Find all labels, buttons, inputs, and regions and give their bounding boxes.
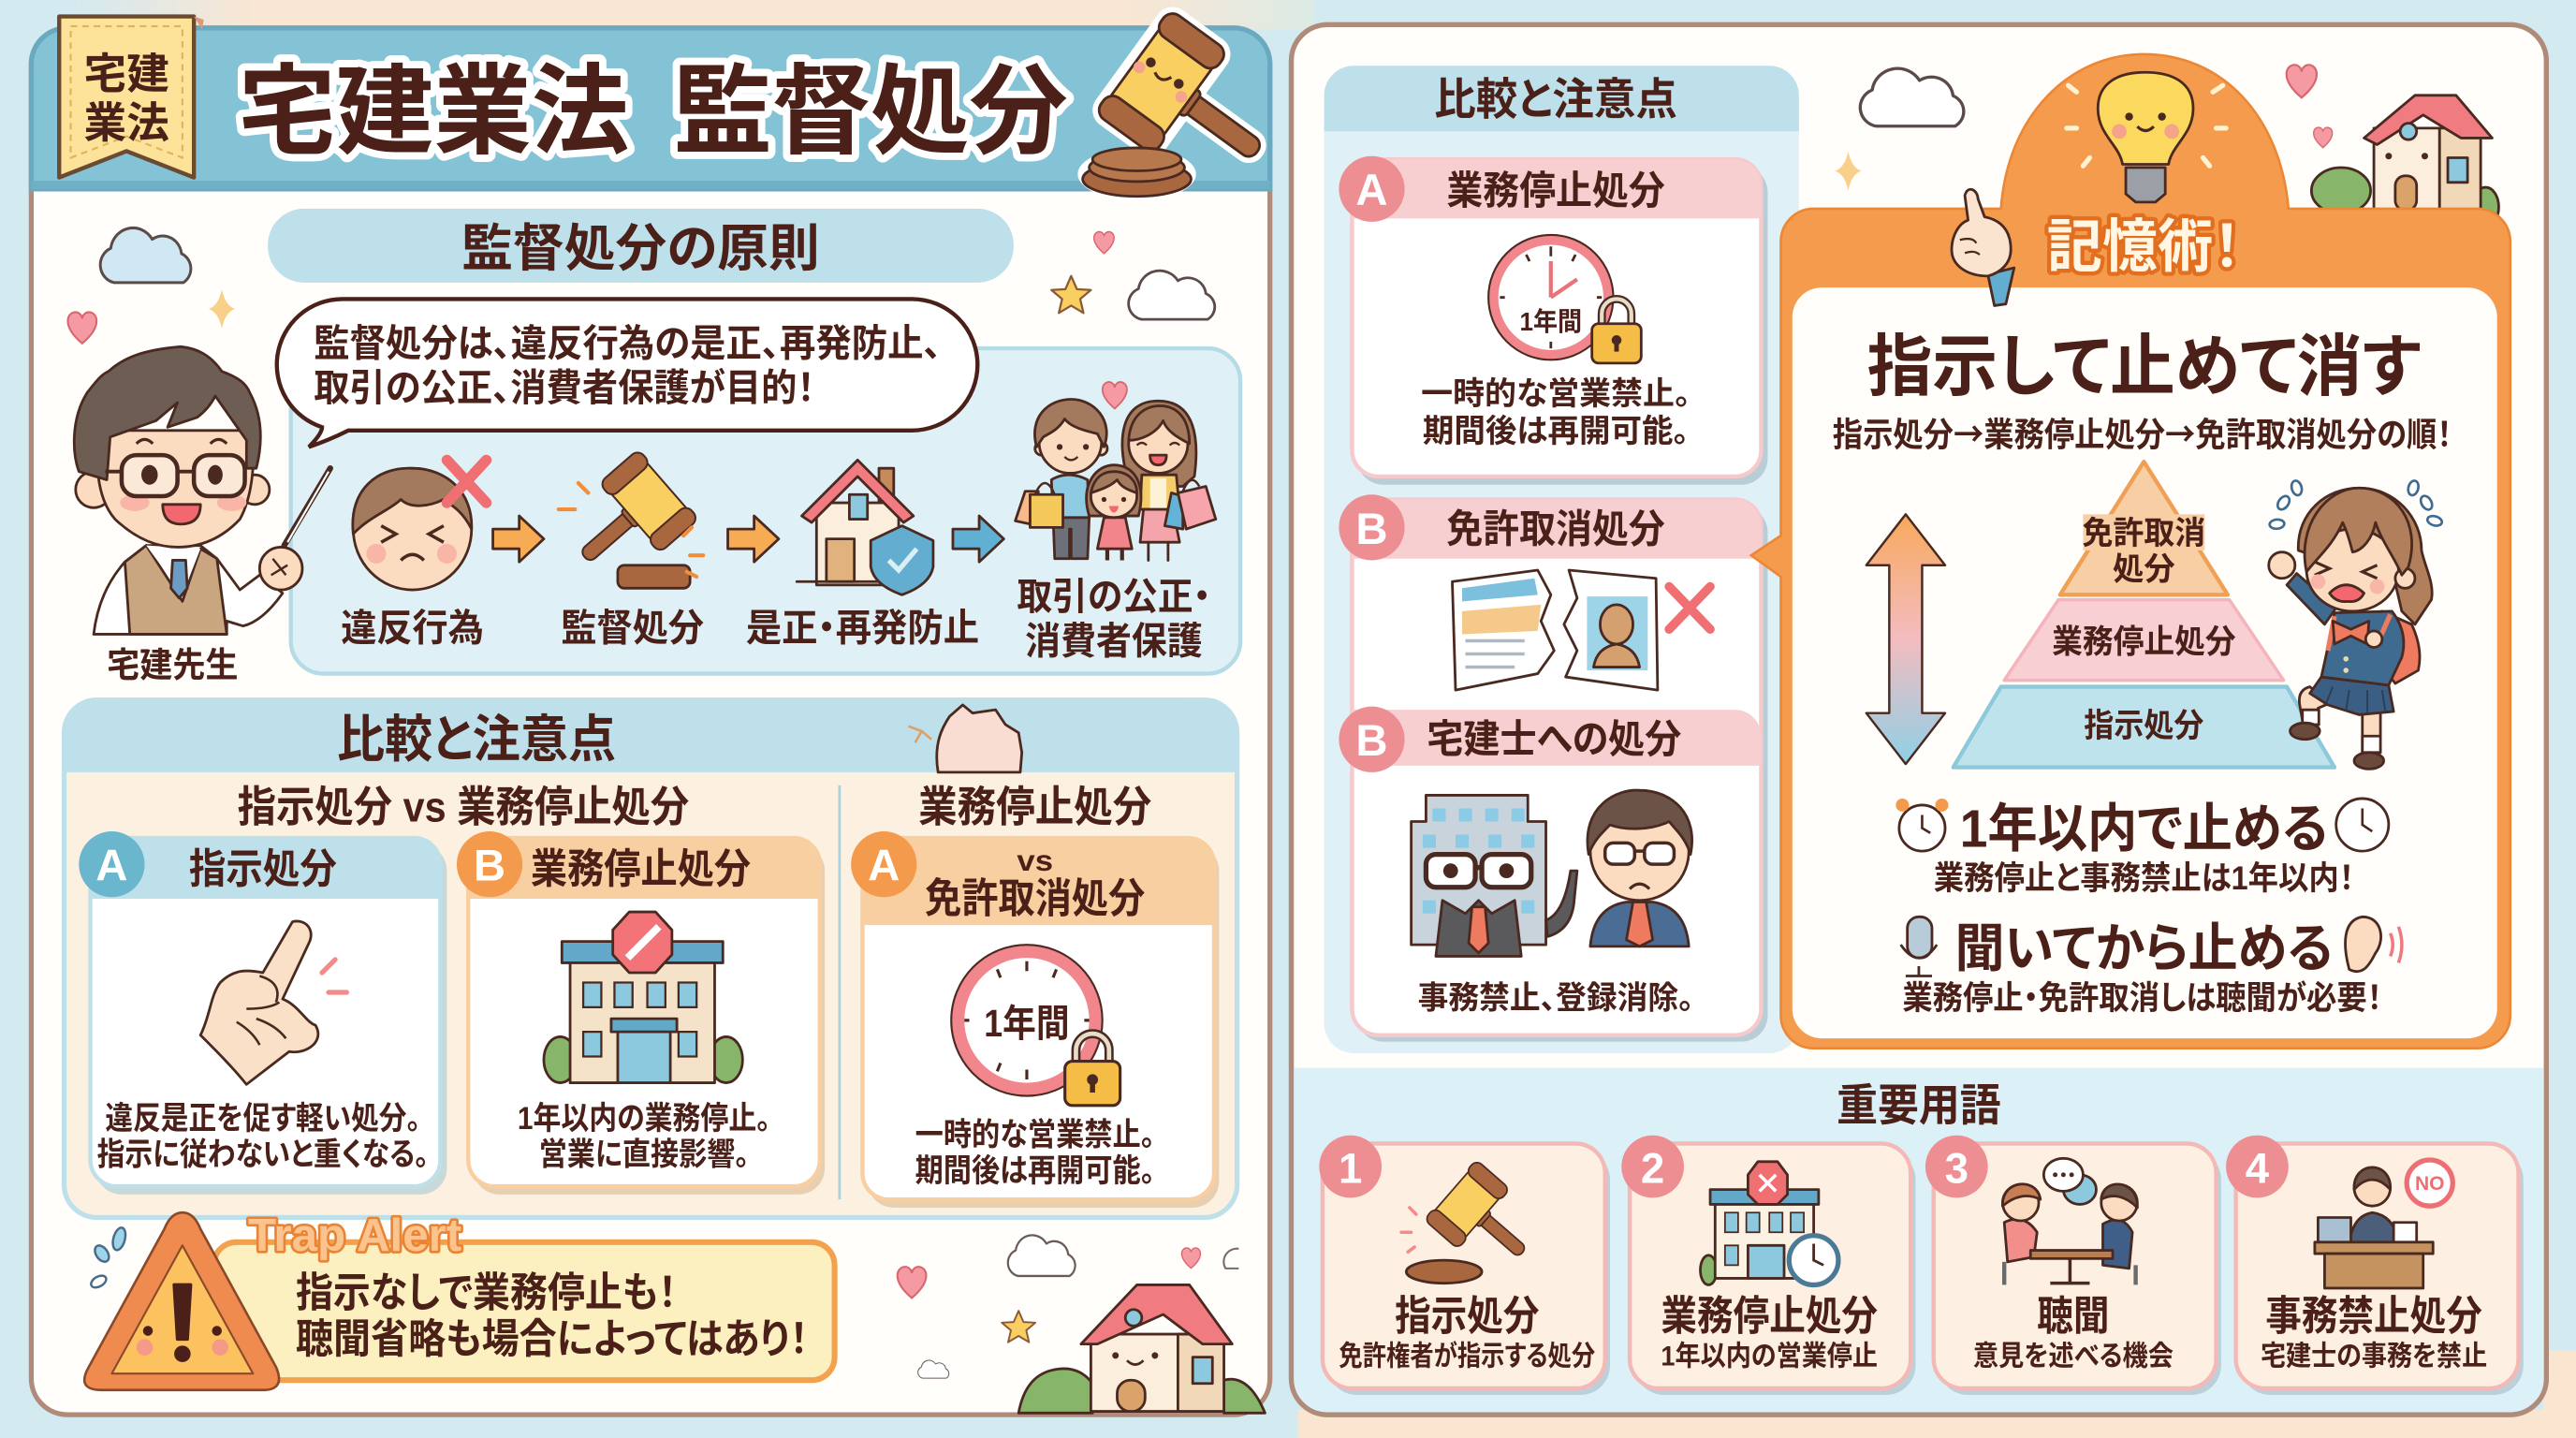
card: B revocation and agent disposition: B xyxy=(1355,505,1388,554)
card: A suspension vs revocation: 一時的な営業禁止。 xyxy=(915,1117,1155,1152)
chart: pyramid xyxy=(1954,462,2334,768)
card: B suspension: 業務停止処分 xyxy=(531,846,751,892)
card: A suspension: A xyxy=(1355,166,1388,215)
card: B revocation and agent disposition xyxy=(1339,494,1767,1042)
title: 監督処分 xyxy=(674,58,1068,168)
panel: process flow xyxy=(291,348,1240,674)
headline: 指示して止めて消す xyxy=(1867,330,2421,404)
card: A suspension: 業務停止処分 xyxy=(1446,169,1665,213)
icon: pointing hand xyxy=(200,921,346,1084)
title xyxy=(239,58,1068,168)
heading: 比較と注意点 xyxy=(1434,76,1677,125)
step: family: 消費者保護 xyxy=(1025,619,1203,662)
card: B suspension xyxy=(457,831,825,1195)
band: agent disposition: B xyxy=(1355,716,1388,766)
term 2: 1年以内の営業停止 xyxy=(1661,1342,1878,1372)
label: teacher: 宅建先生 xyxy=(107,646,239,684)
card: A suspension vs revocation: 免許取消処分 xyxy=(925,875,1145,921)
character: teacher xyxy=(74,346,330,684)
heading: mnemonic: 記憶術！ xyxy=(2047,214,2241,279)
decoration: right top xyxy=(1835,65,2498,227)
rule: hearing first xyxy=(1901,917,2402,1017)
icon: hearing xyxy=(2002,1158,2137,1284)
card: A instruction: A xyxy=(95,842,128,891)
callout: trap alert xyxy=(84,1211,835,1390)
arrow xyxy=(953,516,1003,562)
term 4: 事務禁止処分 xyxy=(2265,1293,2482,1339)
heading: principle: 監督処分の原則 xyxy=(461,220,820,277)
term 2: 2 xyxy=(1641,1144,1664,1192)
chart: pyramid: 処分 xyxy=(2113,552,2175,588)
callout: trap alert: 指示なしで業務停止も！ xyxy=(296,1270,677,1316)
panel: left page xyxy=(31,9,1295,1415)
step: family: 取引の公正・ xyxy=(1017,575,1211,618)
rule: hearing first: 業務停止・免許取消しは聴聞が必要！ xyxy=(1902,980,2382,1017)
heading: glossary: 重要用語 xyxy=(1837,1081,2001,1131)
step: supervision gavel: 監督処分 xyxy=(561,606,704,649)
decoration: bottom left scene xyxy=(898,1235,1265,1413)
step: supervision gavel xyxy=(554,449,704,649)
step: family xyxy=(1016,382,1216,662)
term 2: 業務停止処分 xyxy=(1661,1293,1878,1339)
term 4 xyxy=(2226,1136,2524,1395)
icon: clock with lock: 1年間 xyxy=(1519,307,1582,336)
term 1: 免許権者が指示する処分 xyxy=(1339,1341,1595,1372)
icon: barred desk worker xyxy=(2315,1160,2452,1288)
band: agent disposition: 宅建士への処分 xyxy=(1427,717,1681,761)
term 3 xyxy=(1925,1136,2221,1395)
header band xyxy=(31,28,1270,189)
panel: right page xyxy=(1292,24,2546,1415)
character: student xyxy=(2269,479,2443,769)
card: A suspension vs revocation: 期間後は再開可能。 xyxy=(915,1153,1155,1189)
panel: mnemonic xyxy=(1751,54,2510,1049)
card: A suspension: 期間後は再開可能。 xyxy=(1423,414,1689,449)
step: correction house: 是正・再発防止 xyxy=(746,606,979,649)
term 1: 指示処分 xyxy=(1395,1293,1540,1339)
subheading: right comparison: 業務停止処分 xyxy=(918,783,1152,830)
panel: glossary xyxy=(1293,1068,2545,1413)
double arrow xyxy=(1866,514,1945,764)
order line: 指示処分→業務停止処分→免許取消処分の順！ xyxy=(1833,407,2452,456)
shopping bags xyxy=(1016,480,1216,529)
card: A suspension: 一時的な営業禁止。 xyxy=(1421,376,1690,412)
icon: building mascot xyxy=(1412,795,1577,956)
card: B suspension: 1年以内の業務停止。 xyxy=(518,1101,770,1137)
term 4: 宅建士の事務を禁止 xyxy=(2261,1342,2487,1372)
card: A suspension vs revocation: vs xyxy=(1017,844,1053,877)
callout: trap alert: Trap Alert xyxy=(248,1211,461,1261)
term 3: 意見を述べる機会 xyxy=(1973,1342,2174,1372)
father xyxy=(1034,399,1107,559)
icon: torn licence xyxy=(1453,570,1710,690)
speech bubble xyxy=(277,299,977,447)
mother xyxy=(1122,401,1196,560)
band: agent disposition xyxy=(1339,707,1761,772)
rule: hearing first: 聞いてから止める xyxy=(1955,919,2333,978)
subheading: left comparison: 指示処分 vs 業務停止処分 xyxy=(238,783,690,830)
speech bubble: 取引の公正、消費者保護が目的！ xyxy=(314,366,815,409)
icon: light bulb xyxy=(2067,72,2226,202)
chart: pyramid: 指示処分 xyxy=(2084,708,2203,744)
card: A suspension xyxy=(1339,156,1767,485)
heading: comparison: 比較と注意点 xyxy=(337,712,616,769)
card: A suspension vs revocation xyxy=(851,831,1219,1208)
ribbon badge xyxy=(59,17,204,178)
rule: within one year xyxy=(1895,799,2389,897)
card: B suspension: 営業に直接影響。 xyxy=(539,1137,749,1172)
icon: worried agent xyxy=(1588,790,1692,946)
step: violation: 違反行為 xyxy=(341,606,484,649)
step: violation xyxy=(341,460,487,649)
card: B revocation and agent disposition: 免許取消処分 xyxy=(1446,507,1665,551)
rule: within one year: 1年以内で止める xyxy=(1960,800,2328,858)
heading: principle xyxy=(268,209,1014,283)
icon: one-year clock with lock: 1年間 xyxy=(984,1002,1070,1045)
arrow xyxy=(493,516,544,562)
term 3: 聴聞 xyxy=(2037,1293,2110,1339)
ribbon badge: 業法 xyxy=(84,99,169,147)
chart: pyramid: 免許取消 xyxy=(2083,516,2205,551)
icon: pointing hand xyxy=(1952,189,2014,305)
child xyxy=(1087,465,1141,560)
decoration: pink creature xyxy=(909,705,1022,772)
panel: comparison xyxy=(65,700,1237,1217)
card: A instruction xyxy=(79,831,446,1195)
step: correction house xyxy=(746,460,979,649)
term 1 xyxy=(1319,1136,1610,1395)
panel: comparison column xyxy=(1325,66,1799,1053)
icon: barred desk worker: NO xyxy=(2415,1173,2445,1195)
icon: gavel xyxy=(1401,1160,1548,1284)
term 3: 3 xyxy=(1945,1144,1969,1192)
icon: clock with lock xyxy=(1488,235,1641,363)
icon: title gavel xyxy=(1077,9,1295,203)
title: 宅建業法 xyxy=(239,58,629,168)
icon: one-year clock with lock xyxy=(951,945,1120,1106)
card: B suspension: B xyxy=(474,842,505,891)
rule: within one year: 業務停止と事務禁止は1年以内！ xyxy=(1934,860,2354,897)
card: A suspension vs revocation: A xyxy=(868,842,900,891)
decoration: clouds hearts stars xyxy=(67,227,1215,344)
term 4: 4 xyxy=(2246,1144,2270,1192)
term 2 xyxy=(1621,1136,1915,1395)
ribbon badge: 宅建 xyxy=(84,51,169,98)
card: A instruction: 指示に従わないと重くなる。 xyxy=(97,1137,429,1172)
arrow xyxy=(728,516,779,562)
icon: building with watch xyxy=(1701,1162,1838,1284)
card: A instruction: 違反是正を促す軽い処分。 xyxy=(105,1101,420,1137)
chart: pyramid: 業務停止処分 xyxy=(2052,624,2236,660)
icon: stopped building xyxy=(544,912,742,1083)
callout: trap alert: 聴聞省略も場合によってはあり！ xyxy=(296,1316,809,1362)
card: B revocation and agent disposition: 事務禁止、登録消除。 xyxy=(1418,981,1693,1017)
card: A instruction: 指示処分 xyxy=(189,846,337,892)
term 1: 1 xyxy=(1339,1144,1362,1192)
speech bubble: 監督処分は、違反行為の是正、再発防止、 xyxy=(314,322,942,365)
